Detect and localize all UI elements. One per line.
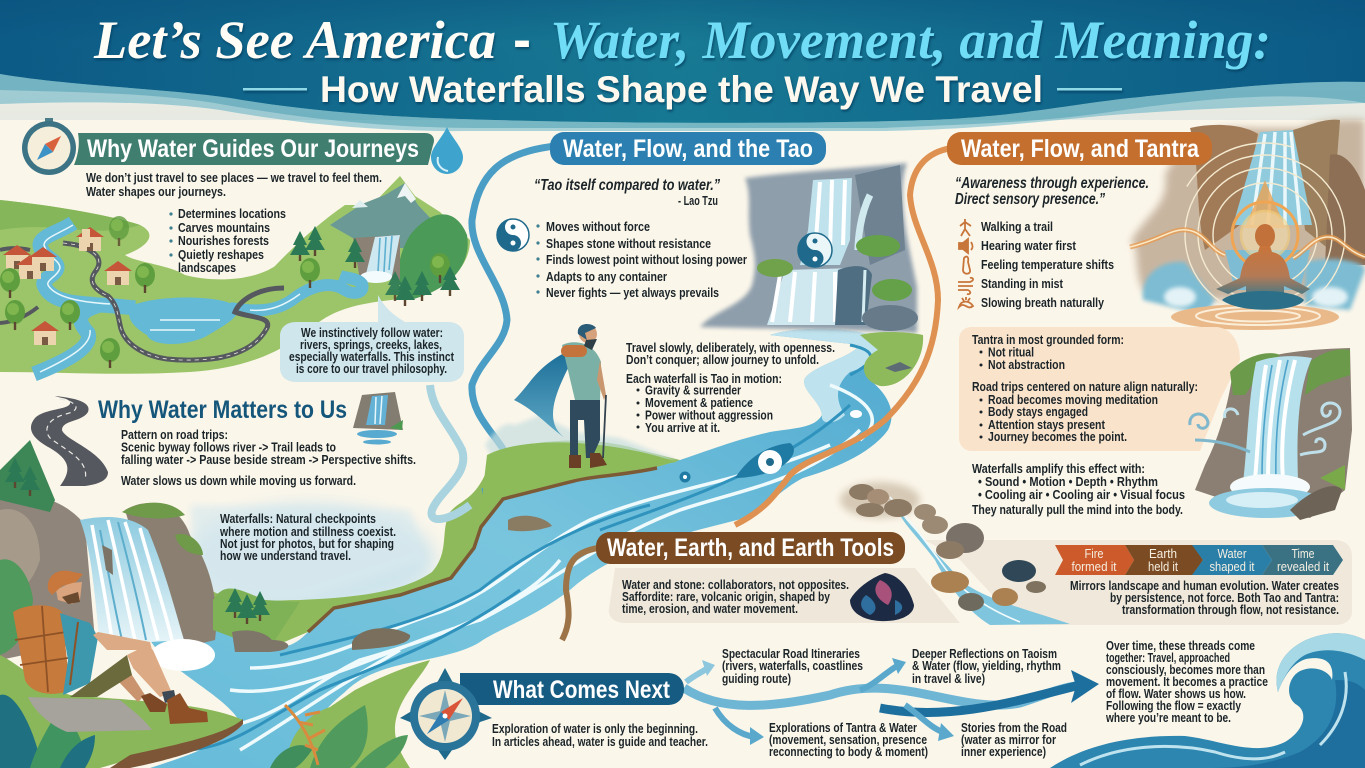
- text: explorations of tantra: Explorations of Tantra & Water: [769, 721, 917, 735]
- panel: tantra grounded form: Tantra in most grounded form:: [972, 333, 1124, 347]
- callout: instinct bubble: rivers, springs, creeks, lakes,: [300, 338, 442, 352]
- panel: tantra grounded form: Road becomes moving meditation: [988, 393, 1158, 407]
- list: sensory experience with icons: Hearing water first: [981, 239, 1077, 253]
- near leg: [127, 645, 172, 697]
- text: travel slowly: [626, 341, 835, 435]
- text: waterfalls amplify: [972, 462, 1185, 517]
- icon: small waterfall: [353, 392, 403, 444]
- callout: instinct bubble: especially waterfalls. This instinct: [289, 350, 455, 364]
- illustration: what comes next flow arrows: [684, 658, 1099, 745]
- banner: why water guides our journeys: Why Water Guides Our Journeys: [87, 135, 419, 163]
- text: deeper reflections: Deeper Reflections on Taoism: [912, 647, 1057, 661]
- text: over time: [1105, 639, 1268, 725]
- text: stories from the road: inner experience): [961, 745, 1046, 759]
- text: stories from the road: (water as mirror for: [961, 733, 1056, 747]
- text: travel slowly: Gravity & surrender: [645, 384, 741, 398]
- arm: [93, 632, 152, 650]
- text: waterfalls amplify: They naturally pull the mind into the body.: [972, 503, 1183, 517]
- shorts: [70, 655, 132, 697]
- connector: pale stream from callout: [430, 385, 470, 519]
- text: waterfalls checkpoints: where motion and stillness coexist.: [219, 525, 396, 539]
- callout: instinct bubble: [280, 295, 464, 382]
- text: spectacular road itineraries: (rivers, waterfalls, coastlines: [722, 659, 863, 673]
- text: travel slowly: Each waterfall is Tao in motion:: [626, 372, 782, 386]
- quote: tantra: Direct sensory presence.”: [955, 191, 1105, 208]
- roads: [63, 243, 284, 360]
- text: over time: movement. It becomes a practice: [1106, 675, 1268, 689]
- icon: yin yang: [497, 219, 529, 251]
- text: travel slowly: You arrive at it.: [645, 421, 720, 435]
- list: what water does: Nourishes forests: [178, 234, 269, 248]
- illustration: hiker with blue cape: [480, 324, 677, 515]
- title: Water, Movement, and Meaning:: [550, 10, 1271, 70]
- panel: tantra grounded form: Not ritual: [988, 346, 1034, 360]
- text: exploration: [492, 722, 708, 749]
- text: travel slowly: Movement & patience: [645, 396, 753, 410]
- list: tao qualities: Shapes stone without resistance: [546, 237, 711, 251]
- chevrons: fire earth water time: Earth: [1149, 546, 1177, 561]
- subtitle: How Waterfalls Shape the Way We Travel: [320, 69, 1043, 110]
- text: water and stone: Saffordite: rare, volcanic origin, shaped by: [622, 590, 830, 604]
- panel: tantra grounded form: [959, 327, 1240, 451]
- text: intro: We don’t just travel to see places — we travel to feel them.: [86, 171, 382, 185]
- chevrons: fire earth water time: revealed it: [1277, 559, 1329, 574]
- rivers and lake: [40, 223, 135, 308]
- illustration: seated hiker: [13, 571, 208, 732]
- connector: brown stream to Earth banner: [562, 548, 598, 640]
- far leg: [117, 672, 145, 702]
- chevrons: fire earth water time: shaped it: [1210, 559, 1255, 574]
- banner: water flow and the tao: Water, Flow, and the Tao: [563, 135, 813, 163]
- list: what water does: landscapes: [178, 261, 236, 275]
- text: explorations of tantra: reconnecting to body & moment): [769, 745, 928, 759]
- text: water and stone: Water and stone: collaborators, not opposites.: [622, 578, 849, 592]
- panel: tantra grounded form: Not abstraction: [988, 358, 1065, 372]
- list: what water does: Quietly reshapes: [178, 248, 264, 262]
- text: over time: Over time, these threads come: [1106, 639, 1255, 653]
- chevrons: fire earth water time: held it: [1148, 559, 1178, 574]
- header band: [0, 0, 1365, 131]
- text: road trip pattern: [121, 428, 416, 488]
- panel: tantra grounded form: Attention stays present: [988, 418, 1106, 432]
- quote: tantra: [955, 175, 1149, 208]
- list: what water does: [169, 207, 286, 275]
- connector: blue stream to Tao banner: [472, 146, 556, 492]
- text: over time: consciously, becomes more than: [1106, 663, 1265, 677]
- banner: what comes next: [460, 673, 684, 705]
- chevrons: fire earth water time: Fire: [1084, 546, 1104, 561]
- list: tao qualities: Never fights — yet always prevails: [546, 286, 719, 300]
- text: water and stone: time, erosion, and water movement.: [622, 602, 798, 616]
- rock seat: [28, 697, 152, 732]
- text: waterfalls amplify: Waterfalls amplify this effect with:: [972, 462, 1145, 476]
- text: waterfalls amplify: • Sound • Motion • Depth • Rhythm: [978, 475, 1158, 489]
- illustration: meditator at waterfall: [1130, 119, 1365, 330]
- chevrons: fire earth water time: [1055, 545, 1343, 575]
- text: waterfalls amplify: • Cooling air • Cooling air • Visual focus: [978, 488, 1185, 502]
- text: waterfalls checkpoints: how we understand travel.: [220, 549, 351, 563]
- text: travel slowly: Don’t conquer; allow journey to unfold.: [626, 353, 819, 367]
- text: over time: where you’re meant to be.: [1105, 711, 1231, 725]
- text: road trip pattern: Pattern on road trips:: [121, 428, 228, 442]
- illustration: ocean wave: [1050, 633, 1365, 768]
- list: tao qualities: Finds lowest point without losing power: [546, 253, 747, 267]
- illustration: river valley landscape: [0, 176, 470, 374]
- list: sensory experience with icons: Walking a trail: [981, 220, 1053, 234]
- quote: lao tzu: “Tao itself compared to water.”: [534, 177, 720, 194]
- chevrons: fire earth water time: Water: [1218, 546, 1247, 561]
- boot: [167, 693, 208, 724]
- list: sensory experience with icons: Standing in mist: [981, 277, 1064, 291]
- quote: lao tzu: - Lao Tzu: [678, 193, 718, 208]
- list: tao qualities: Moves without force: [546, 220, 650, 234]
- illustration: tao waterfall: [700, 163, 923, 386]
- illustration: waterfall river scene: [150, 329, 893, 768]
- text: explorations of tantra: [769, 721, 928, 759]
- icon: winding road: [31, 396, 108, 486]
- title: -: [513, 10, 531, 70]
- text: deeper reflections: [912, 647, 1061, 686]
- backpack: [13, 605, 70, 694]
- text: travel slowly: Power without aggression: [645, 408, 773, 422]
- panel: tantra grounded form: Body stays engaged: [988, 405, 1088, 419]
- brown bank edge: [308, 468, 657, 632]
- text: spectacular road itineraries: Spectacular Road Itineraries: [722, 647, 860, 661]
- icon: saffordite rock: [850, 573, 914, 621]
- text: road trip pattern: Scenic byway follows river -> Trail leads to: [121, 440, 336, 454]
- text: over time: of flow. Water shows us how.: [1106, 687, 1246, 701]
- text: over time: Following the flow = exactly: [1106, 699, 1241, 713]
- illustration: swirling waterfall: [1190, 348, 1352, 520]
- panel: earth tools right background: [925, 540, 1352, 625]
- quote: tantra: “Awareness through experience.: [955, 175, 1149, 192]
- list: tao qualities: Adapts to any container: [546, 270, 667, 284]
- list: tao qualities: [536, 220, 747, 300]
- head and cap: [56, 582, 82, 604]
- text: water and stone: [622, 578, 849, 616]
- text: intro: [86, 171, 382, 199]
- text: road trip pattern: Water slows us down while moving us forward.: [121, 474, 356, 488]
- list: sensory experience with icons: [958, 219, 1114, 310]
- text: intro: Water shapes our journeys.: [86, 185, 226, 199]
- heading: why water matters to us: Why Water Matters to Us: [98, 396, 347, 424]
- text: road trip pattern: falling water -> Pause beside stream -> Perspective shifts.: [121, 453, 416, 467]
- text: explorations of tantra: (movement, sensation, presence: [769, 733, 927, 747]
- illustration: grassy foreground: [0, 655, 430, 768]
- text: waterfalls checkpoints: [219, 512, 396, 563]
- title: [93, 10, 1271, 70]
- text: waterfalls checkpoints: Waterfalls: Natural checkpoints: [220, 512, 376, 526]
- text: deeper reflections: & Water (flow, yielding, rhythm: [912, 659, 1061, 673]
- illustration: rocky stream: [840, 482, 1070, 625]
- icon: compass rose: [400, 668, 492, 760]
- text: deeper reflections: in travel & live): [912, 672, 985, 686]
- text: exploration: In articles ahead, water is guide and teacher.: [492, 735, 708, 749]
- text: over time: together: Travel, approached: [1106, 651, 1230, 665]
- callout: instinct bubble: is core to our travel philosophy.: [296, 362, 447, 376]
- text: travel slowly: Travel slowly, deliberately, with openness.: [626, 341, 835, 355]
- text: stories from the road: Stories from the Road: [961, 721, 1067, 735]
- torso: [60, 613, 98, 695]
- text: spectacular road itineraries: [722, 647, 863, 686]
- text: spectacular road itineraries: guiding route): [722, 672, 791, 686]
- banner: what comes next: What Comes Next: [493, 676, 671, 704]
- connector: orange stream to Tantra banner: [735, 148, 952, 525]
- text: stories from the road: [961, 721, 1067, 759]
- icon: water drop: [431, 127, 463, 174]
- text: waterfalls checkpoints: Not just for photos, but for shaping: [220, 537, 394, 551]
- illustration: large waterfall and rocks: [0, 440, 300, 671]
- banner: water earth and earth tools: Water, Earth, and Earth Tools: [607, 534, 894, 562]
- text: mirrors landscape: [1070, 579, 1339, 617]
- list: sensory experience with icons: Slowing breath naturally: [981, 296, 1104, 310]
- callout: instinct bubble: We instinctively follow water:: [301, 326, 443, 340]
- main river: [150, 329, 893, 768]
- list: what water does: Carves mountains: [178, 221, 270, 235]
- chevrons: fire earth water time: Time: [1292, 546, 1314, 561]
- list: sensory experience with icons: Feeling temperature shifts: [981, 258, 1114, 272]
- banner: water flow and tantra: Water, Flow, and Tantra: [961, 135, 1200, 163]
- river stones: [352, 628, 410, 650]
- panel: tantra grounded form: Journey becomes the point.: [988, 430, 1127, 444]
- panel: earth tools left background: [609, 568, 960, 623]
- text: exploration: Exploration of water is only the beginning.: [492, 722, 698, 736]
- title: Let’s See America: [93, 10, 496, 70]
- list: what water does: Determines locations: [178, 207, 286, 221]
- panel: tantra grounded form: Road trips centered on nature align naturally:: [972, 380, 1198, 394]
- chevrons: fire earth water time: formed it: [1072, 559, 1117, 574]
- icons: river eye symbols: [680, 410, 862, 482]
- green river bank: [210, 441, 680, 648]
- quote: lao tzu: [534, 177, 720, 208]
- icon: compass: [22, 118, 76, 175]
